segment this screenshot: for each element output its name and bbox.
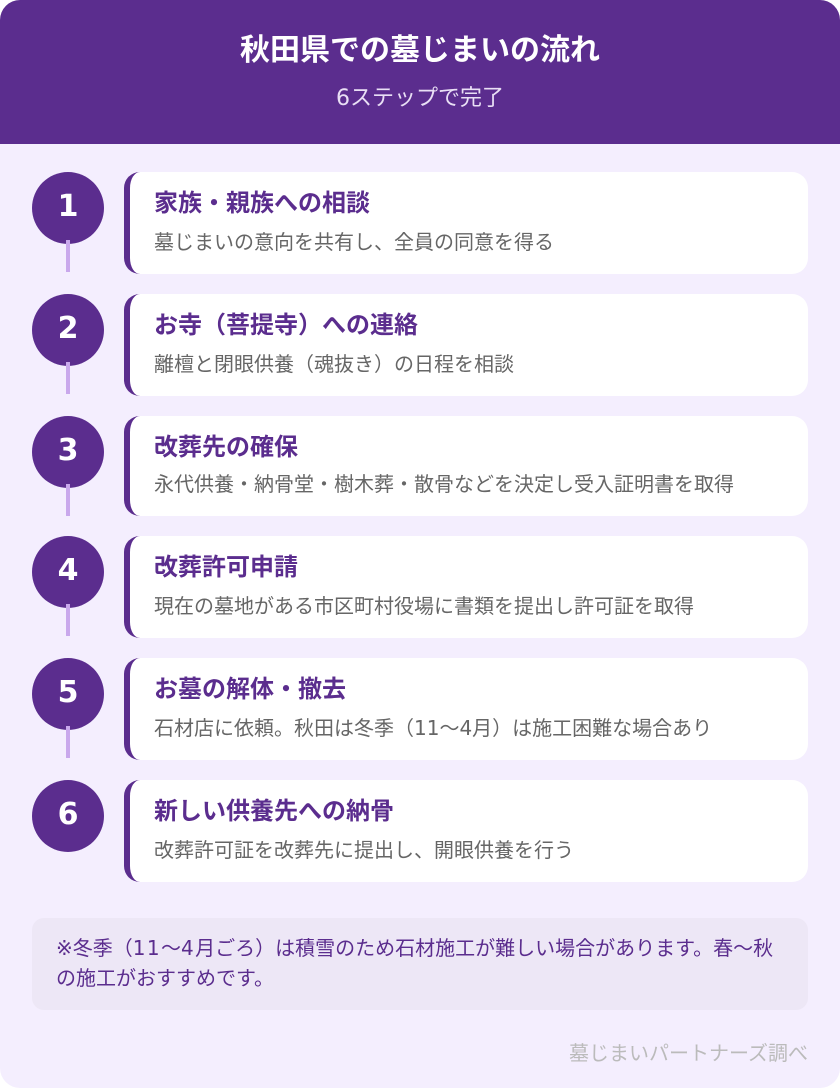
step 1 number — [32, 172, 104, 244]
step 5 number: 5 — [58, 675, 78, 710]
step 2 connector — [66, 362, 70, 394]
note callout: ※冬季（11～4月ごろ）は積雪のため石材施工が難しい場合があります。春～秋の施工がおすすめです。 — [56, 936, 773, 990]
step 1 number: 1 — [58, 189, 78, 224]
step 4 description: 現在の墓地がある市区町村役場に書類を提出し許可証を取得 — [154, 594, 694, 618]
step 2 card — [124, 294, 808, 396]
step 6 number: 6 — [58, 797, 78, 832]
step 6 card — [124, 780, 808, 882]
step 2 number — [32, 294, 104, 366]
step 5 connector — [66, 726, 70, 758]
step 1 card — [124, 172, 808, 274]
step 3 connector — [66, 484, 70, 516]
title: 秋田県での墓じまいの流れ — [240, 33, 600, 68]
step 5 number — [32, 658, 104, 730]
step 1 description: 墓じまいの意向を共有し、全員の同意を得る — [154, 230, 554, 254]
step 3 number: 3 — [58, 433, 78, 468]
step 6 number — [32, 780, 104, 852]
step 4 number — [32, 536, 104, 608]
step 5 card — [124, 658, 808, 760]
step 4 number: 4 — [58, 553, 78, 588]
note callout — [32, 918, 808, 1010]
step 1 heading: 家族・親族への相談 — [154, 189, 370, 217]
step 2 description: 離檀と閉眼供養（魂抜き）の日程を相談 — [154, 352, 514, 376]
step 2 number: 2 — [58, 311, 78, 346]
step 3 card — [124, 416, 808, 516]
step 2 heading: お寺（菩提寺）への連絡 — [154, 311, 418, 339]
step 1 connector — [66, 240, 70, 272]
step 3 description: 永代供養・納骨堂・樹木葬・散骨などを決定し受入証明書を取得 — [154, 472, 734, 496]
step 3 number — [32, 416, 104, 488]
step 5 description: 石材店に依頼。秋田は冬季（11～4月）は施工困難な場合あり — [154, 716, 712, 740]
step 4 card — [124, 536, 808, 638]
source credit: 墓じまいパートナーズ調べ — [569, 1041, 808, 1065]
step 6 heading: 新しい供養先への納骨 — [154, 797, 394, 825]
step 5 heading: お墓の解体・撤去 — [154, 675, 346, 703]
subtitle: 6ステップで完了 — [336, 86, 504, 111]
step 6 description: 改葬許可証を改葬先に提出し、開眼供養を行う — [154, 838, 574, 862]
step 4 heading: 改葬許可申請 — [154, 553, 298, 581]
step 3 heading: 改葬先の確保 — [154, 433, 298, 461]
step 4 connector — [66, 604, 70, 636]
header band — [0, 0, 840, 144]
